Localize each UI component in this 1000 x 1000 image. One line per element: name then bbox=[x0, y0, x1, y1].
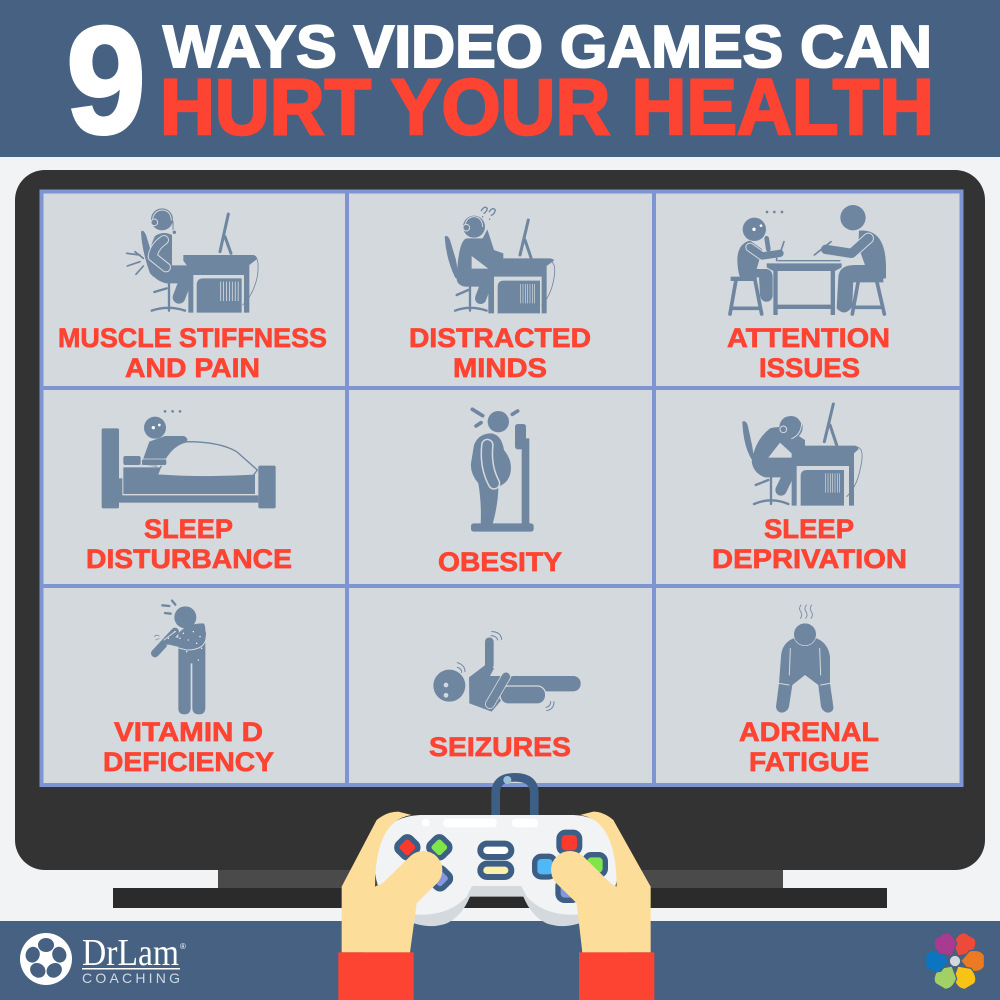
panel: vitamin D deficiency bbox=[103, 601, 274, 777]
label bbox=[712, 514, 907, 574]
icon: child and tutor at table bbox=[730, 205, 886, 315]
icon: person on scale bbox=[471, 409, 534, 532]
icon: exhausted person bending bbox=[776, 605, 833, 713]
title: HURT YOUR HEALTH bbox=[160, 62, 934, 151]
title: WAYS VIDEO GAMES CAN bbox=[163, 14, 932, 80]
icon: controller body bbox=[375, 815, 618, 926]
label: DISTRACTED bbox=[409, 323, 591, 353]
screen grid bbox=[41, 191, 962, 785]
panel: muscle stiffness and pain bbox=[58, 208, 327, 383]
logo: DrLam Coaching bbox=[20, 932, 186, 986]
icon: person awake in bed bbox=[102, 410, 276, 508]
icon: controller cable bbox=[496, 776, 534, 817]
wordmark: DrLam bbox=[82, 932, 179, 974]
label: VITAMIN D bbox=[114, 717, 263, 747]
icon: gamer asleep at desk bbox=[742, 404, 862, 506]
panel: attention issues bbox=[727, 205, 890, 383]
label: MINDS bbox=[453, 353, 547, 383]
label bbox=[739, 717, 879, 777]
icon: person having a seizure bbox=[433, 632, 581, 712]
panel: sleep deprivation bbox=[712, 404, 907, 574]
icon: colour flower bbox=[926, 930, 984, 992]
panel: seizures bbox=[429, 632, 581, 762]
title: 9 bbox=[66, 0, 146, 166]
monitor body bbox=[15, 170, 985, 870]
label: ADRENAL bbox=[739, 717, 879, 747]
label: DEFICIENCY bbox=[103, 747, 274, 777]
icon: left hand bbox=[342, 812, 423, 952]
icon: logo mark bbox=[20, 933, 72, 985]
left cuff bbox=[338, 952, 414, 1000]
divider and tagline: COACHING bbox=[82, 970, 180, 986]
label bbox=[409, 323, 591, 383]
footer band bbox=[0, 921, 1000, 1000]
label: FATIGUE bbox=[749, 747, 869, 777]
label: OBESITY bbox=[438, 547, 562, 577]
registered mark: ® bbox=[180, 942, 186, 951]
label bbox=[86, 514, 292, 574]
game controller and hands bbox=[338, 776, 654, 1000]
panel: obesity bbox=[438, 409, 562, 577]
label: DEPRIVATION bbox=[712, 544, 907, 574]
icon: person with skin irritation bbox=[154, 601, 206, 714]
header band bbox=[0, 0, 1000, 157]
title bbox=[66, 0, 934, 166]
monitor stand bbox=[113, 870, 887, 908]
label: DISTURBANCE bbox=[86, 544, 292, 574]
panel: adrenal fatigue bbox=[739, 605, 879, 777]
label bbox=[727, 323, 890, 383]
icon: gamer with back pain bbox=[127, 208, 258, 313]
label: SEIZURES bbox=[429, 732, 571, 762]
label: AND PAIN bbox=[125, 353, 260, 383]
panel: distracted minds bbox=[409, 207, 591, 383]
icon: right hand bbox=[570, 812, 651, 952]
label: MUSCLE STIFFNESS bbox=[58, 323, 327, 353]
label: SLEEP bbox=[144, 514, 233, 544]
icon: confused gamer bbox=[445, 207, 555, 313]
label: SLEEP bbox=[764, 514, 854, 544]
label: ATTENTION bbox=[727, 323, 890, 353]
label bbox=[58, 323, 327, 383]
label: ISSUES bbox=[759, 353, 860, 383]
label bbox=[103, 717, 274, 777]
right cuff bbox=[579, 952, 654, 1000]
panel: sleep disturbance bbox=[86, 410, 292, 574]
